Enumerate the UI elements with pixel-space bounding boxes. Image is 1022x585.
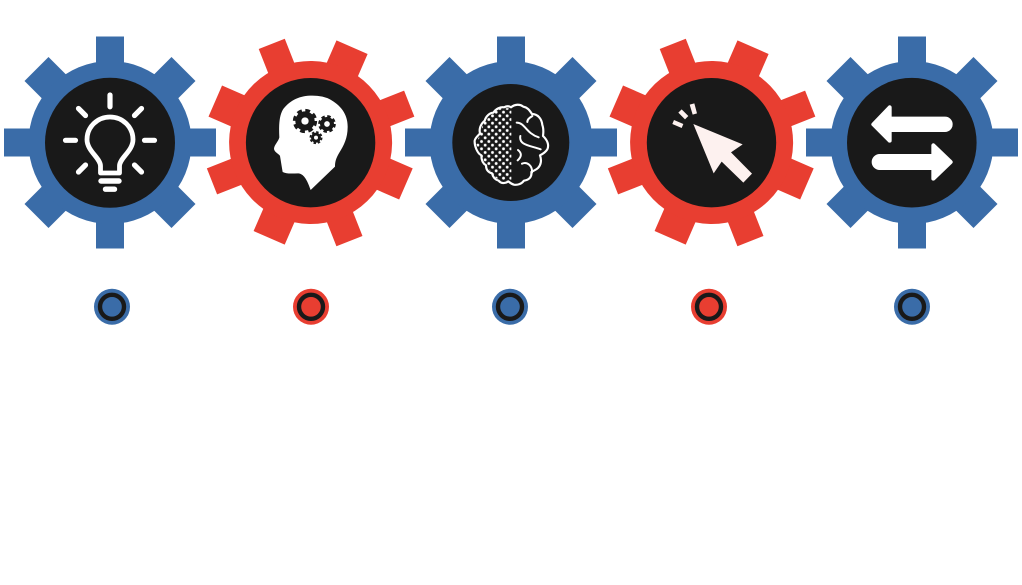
marker dot 3 [492,289,528,325]
icon: brain [475,105,548,185]
marker dot 1 [94,289,130,325]
black disc [452,84,569,201]
red gear body [574,5,849,280]
marker dot 2 [293,289,329,325]
blue gear body [4,36,216,248]
red gear body [173,5,448,280]
gear 1: light bulb [4,36,216,248]
blue gear body [405,36,617,248]
gear 3: brain [405,36,617,248]
blue gear body [806,36,1018,248]
gear 5: exchange arrows [806,36,1018,248]
gear 2: head with cogs [173,5,448,280]
icon: two opposing arrows [873,107,951,179]
marker dot 4 [691,289,727,325]
black disc [647,78,776,207]
black disc [45,78,175,208]
icon: head with cogs [274,96,348,190]
black disc [847,78,977,208]
icon: mouse cursor [672,103,752,183]
marker dot 5 [894,289,930,325]
black disc [246,78,375,207]
gear 4: cursor [574,5,849,280]
icon: light bulb [66,95,154,189]
